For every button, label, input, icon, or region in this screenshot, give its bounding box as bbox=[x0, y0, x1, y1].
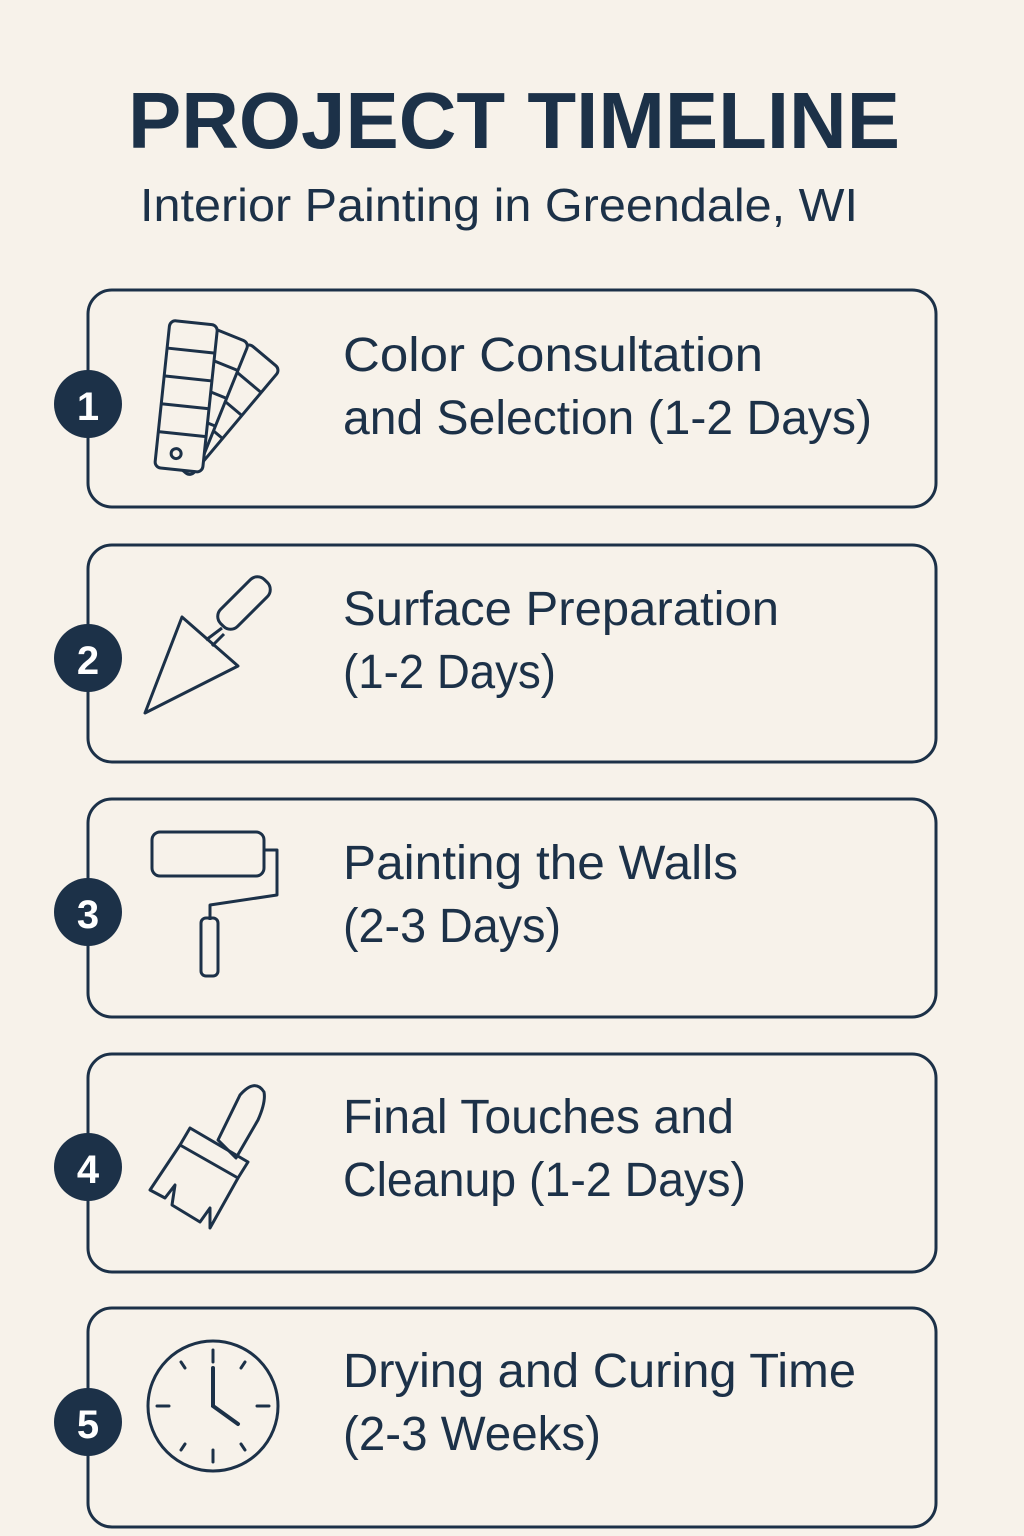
panel: step 1 bbox=[54, 290, 936, 507]
icon: swatches bbox=[155, 320, 280, 477]
step text: Color Consultation bbox=[343, 329, 763, 382]
number badge 5: 5 bbox=[77, 1403, 99, 1447]
step text: Drying and Curing Time bbox=[343, 1345, 856, 1398]
title: PROJECT TIMELINE bbox=[128, 76, 900, 165]
panel: step 3 bbox=[54, 799, 936, 1017]
number badge 3: 3 bbox=[77, 893, 99, 937]
number badge 3 bbox=[54, 878, 122, 946]
number badge 1 bbox=[54, 370, 122, 438]
subtitle: Interior Painting in Greendale, WI bbox=[140, 179, 858, 231]
icon: brush bbox=[150, 1086, 264, 1228]
panel: step 5 bbox=[54, 1308, 936, 1527]
step text: (2-3 Weeks) bbox=[343, 1408, 601, 1461]
step text: Cleanup (1-2 Days) bbox=[343, 1154, 746, 1207]
icon: roller bbox=[152, 832, 277, 976]
panel: step 2 bbox=[54, 545, 936, 762]
number badge 4: 4 bbox=[77, 1148, 100, 1192]
step text: (1-2 Days) bbox=[343, 646, 556, 699]
step text: Final Touches and bbox=[343, 1091, 734, 1144]
number badge 4 bbox=[54, 1133, 122, 1201]
step text: and Selection (1-2 Days) bbox=[343, 392, 872, 445]
number badge 2: 2 bbox=[77, 639, 99, 683]
step text: Painting the Walls bbox=[343, 837, 738, 890]
icon: clock bbox=[148, 1341, 278, 1471]
icon: trowel bbox=[145, 573, 274, 713]
number badge 5 bbox=[54, 1388, 122, 1456]
number badge 2 bbox=[54, 624, 122, 692]
step text: Surface Preparation bbox=[343, 583, 779, 636]
panel: step 4 bbox=[54, 1054, 936, 1272]
step text: (2-3 Days) bbox=[343, 900, 561, 953]
number badge 1: 1 bbox=[77, 385, 99, 429]
